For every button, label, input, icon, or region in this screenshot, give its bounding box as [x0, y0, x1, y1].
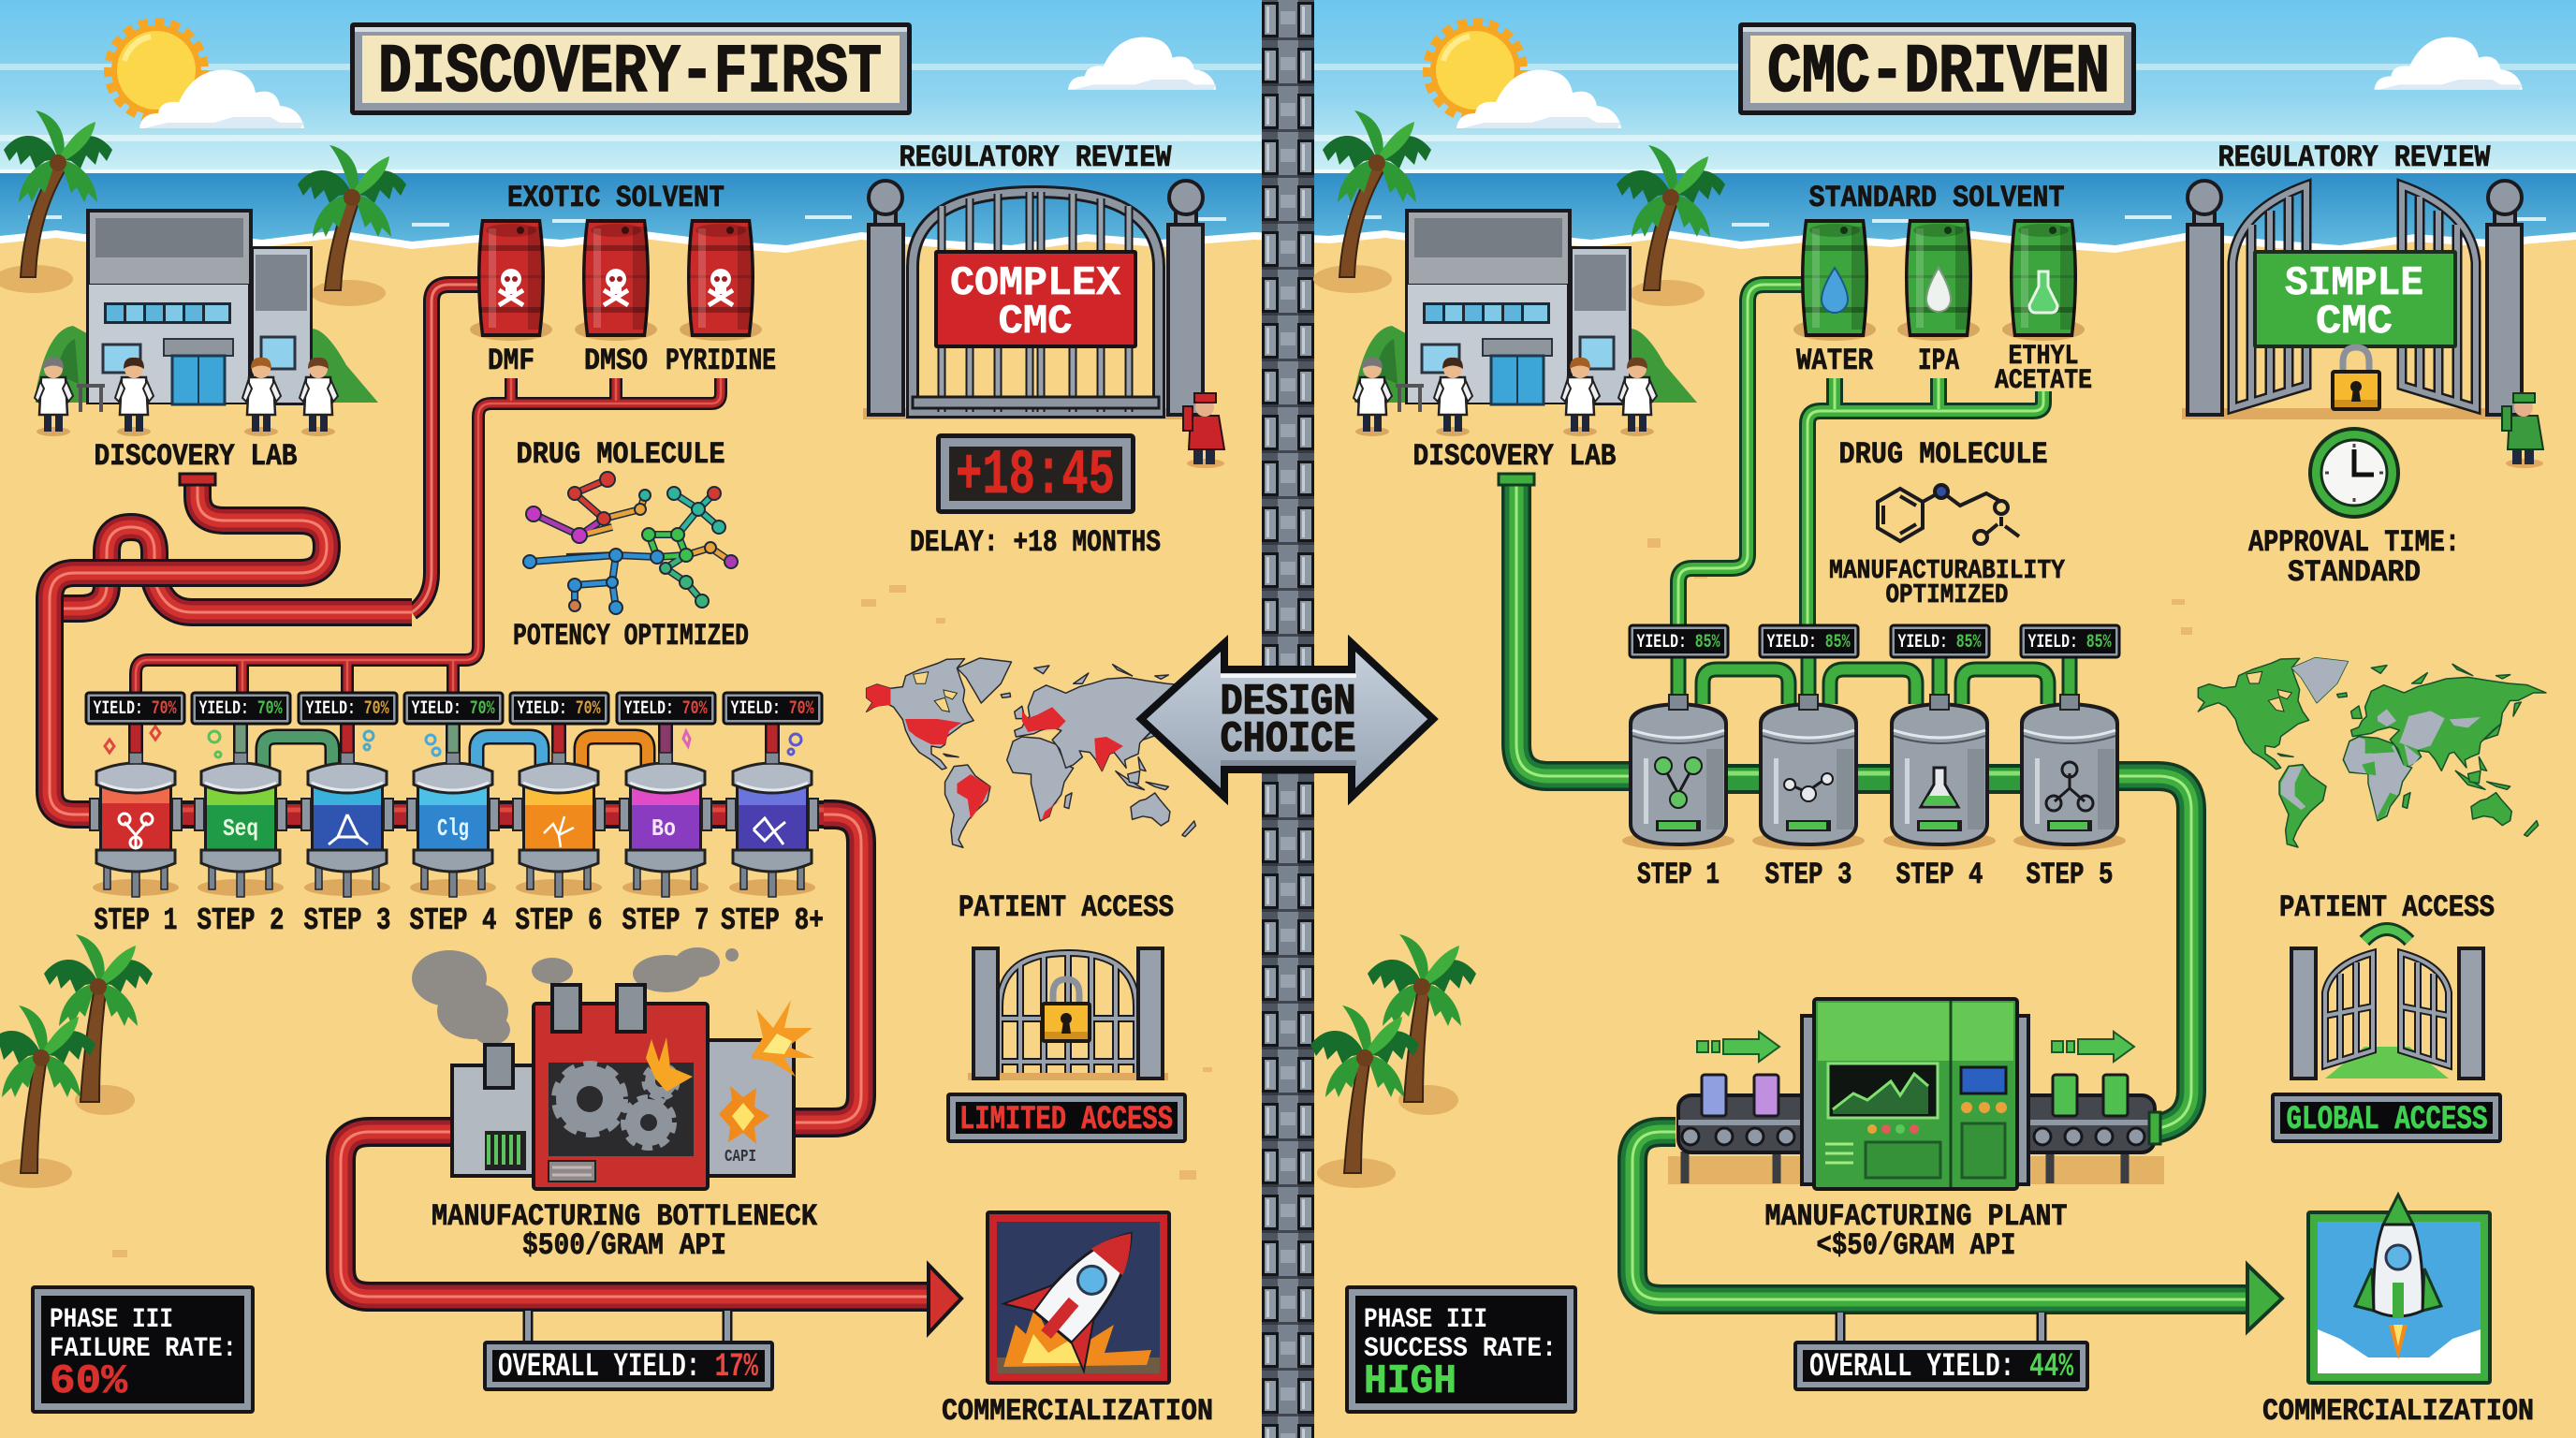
plant monitor: [1828, 1064, 1938, 1118]
step labels right: STEP 1: [1637, 858, 1720, 892]
label: discovery lab right: DISCOVERY LAB: [1413, 439, 1616, 474]
arrow: design choice: DESIGN: [1221, 678, 1355, 726]
yield badges right: [1630, 625, 2119, 657]
badge: step 1 yield: YIELD: 85%: [1636, 632, 1720, 653]
palm trees left top: [0, 110, 406, 306]
badge: step 3 yield: YIELD: 70%: [305, 698, 389, 720]
solvent labels right: ETHYL: [2009, 341, 2078, 373]
phase iii failure box: FAILURE RATE:: [50, 1333, 237, 1365]
badge: step 7 yield: [617, 693, 715, 724]
step labels left: [94, 903, 824, 938]
badge: step 4 yield: YIELD: 70%: [412, 698, 495, 720]
process pipes between right tanks: [1633, 657, 2115, 779]
commercialization rocket launch: [2306, 1195, 2492, 1385]
step labels right: STEP 4: [1896, 858, 1983, 892]
label: discovery lab: DISCOVERY LAB: [94, 439, 298, 474]
manufacturing bottleneck machine: [412, 947, 814, 1189]
label: patient access left: PATIENT ACCESS: [959, 890, 1174, 925]
vessel: step 2: [195, 753, 286, 897]
step labels right: [1637, 858, 2114, 892]
badge: step 5 yield: YIELD: 85%: [2027, 632, 2112, 653]
map patches: green africa: [2362, 744, 2398, 819]
palm trees right top: [1313, 110, 1725, 306]
world map right: [2198, 658, 2546, 847]
map highlights: red markets: [867, 684, 1123, 820]
sign: complex cmc: CMC: [998, 299, 1073, 345]
badge: global access: [2271, 1093, 2502, 1143]
badge: step 3 yield: YIELD: 85%: [1767, 632, 1851, 653]
label: commercialization right: COMMERCIALIZATION: [2262, 1394, 2534, 1429]
solvent labels right: IPA: [1918, 344, 1960, 378]
sign: simple cmc: [2253, 250, 2457, 348]
floating particles above vessels: [105, 726, 801, 757]
process pipes between left vessels: [96, 724, 824, 814]
label: manufacturing bottleneck: $500/GRAM API: [522, 1228, 726, 1263]
step tanks right: [1622, 695, 2126, 850]
label: manufacturing bottleneck: [432, 1199, 818, 1263]
label: approval time: STANDARD: [2288, 555, 2421, 590]
vessel: step 7: Bo: [651, 814, 676, 843]
tank: step 5: [2013, 695, 2126, 850]
chimneys: [485, 985, 645, 1088]
barrel: water: [1793, 219, 1876, 341]
badge: step 1 yield: [86, 693, 184, 724]
icon: clock: [2308, 427, 2400, 519]
icon: small cloud: [1068, 37, 1216, 90]
label: regulatory review right: REGULATORY REVIEW: [2218, 140, 2491, 175]
label: approval time: APPROVAL TIME:: [2248, 525, 2460, 560]
rocket body tilted: [1003, 1200, 1171, 1372]
map gaps: grey regions: [2281, 658, 2481, 819]
label: manufacturability optimized: MANUFACTURABILITY: [1829, 555, 2065, 586]
phase iii failure box: [31, 1285, 255, 1414]
solvent labels left: DMSO: [584, 344, 648, 378]
conveyor belt: [1678, 1095, 2155, 1183]
label: standard solvent: STANDARD SOLVENT: [1808, 181, 2065, 215]
label: manufacturing bottleneck: MANUFACTURING BOTTLENECK: [432, 1199, 818, 1234]
discovery lab building right: [1354, 209, 1697, 436]
icon: simple drug molecule: [1878, 485, 2019, 544]
vessel: step 1: [90, 753, 182, 897]
sign: simple cmc: CMC: [2316, 299, 2393, 345]
pipe right: plant to commercialization: [1632, 1132, 2282, 1331]
icon: open padlock: [2331, 347, 2381, 411]
barrel: ipa: [1897, 219, 1980, 341]
overall yield sign right: [1793, 1313, 2089, 1391]
phase iii success box: [1345, 1285, 1577, 1414]
step labels left: STEP 6: [515, 903, 603, 938]
barrel: dmf: [470, 219, 552, 341]
tank: step 3: [1752, 695, 1865, 850]
palm trees right bottom: [1310, 934, 1476, 1188]
step labels left: STEP 4: [410, 903, 496, 938]
sign: complex cmc: [934, 250, 1137, 348]
badge: limited access: [946, 1093, 1187, 1143]
pipe right connector to plant: [2149, 1112, 2160, 1144]
main green pipe right: [1499, 474, 2191, 1128]
badge: step 2 yield: [192, 693, 290, 724]
sparks: [646, 1037, 693, 1092]
sign: complex cmc: COMPLEX: [950, 260, 1121, 307]
delay timer: +18:45: [956, 440, 1115, 512]
badge: step 7 yield: YIELD: 70%: [623, 698, 708, 720]
phase iii success box: PHASE III: [1364, 1304, 1487, 1336]
badge: step 6 yield: YIELD: 70%: [517, 698, 601, 720]
badge: step 4 yield: [1891, 625, 1989, 657]
icon: cloud: [139, 70, 304, 128]
overall yield sign left: [483, 1311, 774, 1391]
badge: step 2 yield: YIELD: 70%: [198, 698, 283, 720]
icon: cloud right: [1456, 70, 1621, 128]
tank: step 4: [1883, 695, 1996, 850]
label: potency optimized: POTENCY OPTIMIZED: [513, 619, 749, 653]
label: manufacturability optimized: [1829, 555, 2065, 610]
solvent labels right: [1796, 341, 2092, 397]
solvent labels left: DMF: [488, 344, 534, 378]
label: manufacturing plant: [1765, 1199, 2067, 1263]
icon: sun right: [1427, 22, 1523, 118]
icon: complex drug molecule: [523, 472, 738, 614]
phase iii success box: HIGH: [1364, 1358, 1456, 1405]
label: patient access right: PATIENT ACCESS: [2279, 890, 2495, 925]
yield badges left: [86, 693, 822, 724]
right panel: sky scenery: [1427, 22, 2523, 128]
smoke: [412, 947, 739, 1045]
pipe left: bottleneck to commercialization: [341, 1132, 961, 1333]
vessel: step 7: [620, 753, 711, 897]
solvent labels left: PYRIDINE: [666, 344, 776, 378]
pipes left: solvent manifold: [136, 285, 721, 695]
badge: step 6 yield: [510, 693, 608, 724]
label: regulatory review left: REGULATORY REVIEW: [899, 140, 1172, 175]
gears: [556, 1065, 677, 1146]
vessel: step 2: Seq: [223, 814, 258, 843]
patient access gate open: [2291, 929, 2483, 1078]
overall yield sign left: OVERALL YIELD: 17%: [498, 1348, 759, 1386]
title: discovery-first: DISCOVERY-FIRST: [378, 34, 882, 111]
manufacturing plant: [1668, 999, 2164, 1189]
commercialization failed rocket: [986, 1200, 1171, 1385]
badge: global access: GLOBAL ACCESS: [2286, 1101, 2488, 1138]
label: manufacturing plant: <$50/GRAM API: [1816, 1228, 2016, 1263]
overall yield sign right: OVERALL YIELD: 44%: [1809, 1348, 2074, 1386]
badge: step 8+ yield: YIELD: 70%: [730, 698, 814, 720]
regulatory gate open: [2182, 181, 2530, 419]
step labels left: STEP 1: [94, 903, 178, 938]
regulatory gate closed: [863, 181, 1211, 419]
step labels right: STEP 5: [2026, 858, 2114, 892]
step labels left: STEP 3: [303, 903, 391, 938]
label: manufacturability optimized: OPTIMIZED: [1885, 580, 2009, 610]
vessel: step 4: [407, 753, 499, 897]
badge: step 4 yield: [404, 693, 503, 724]
patient access gate locked: [968, 948, 1168, 1080]
delay timer: [936, 433, 1135, 514]
badge: step 1 yield: [1630, 625, 1728, 657]
palm trees left bottom: [0, 934, 153, 1188]
red barrels: [470, 219, 762, 341]
badge: step 4 yield: YIELD: 85%: [1898, 632, 1982, 653]
arrow: design choice: [1141, 643, 1433, 797]
solvent labels right: WATER: [1796, 344, 1874, 378]
pipes right: solvent lines: [1678, 285, 2043, 627]
sign: simple cmc: SIMPLE: [2285, 260, 2423, 307]
arrow: design choice: CHOICE: [1221, 715, 1355, 764]
bottles: [1702, 1075, 2128, 1116]
chain divider: [1262, 0, 1314, 1438]
badge: step 3 yield: [299, 693, 397, 724]
vessel: step 6: [513, 753, 605, 897]
green barrels: [1793, 219, 2085, 341]
title: cmc-driven: CMC-DRIVEN: [1767, 34, 2110, 111]
solvent labels left: [488, 344, 776, 378]
flow arrows: [1697, 1032, 2134, 1062]
icon: green guard: [2502, 393, 2543, 468]
badge: limited access: LIMITED ACCESS: [959, 1101, 1173, 1138]
label: commercialization left: COMMERCIALIZATION: [942, 1394, 1213, 1429]
step labels right: STEP 3: [1765, 858, 1852, 892]
tank: step 1: [1622, 695, 1734, 850]
phase iii failure box: 60%: [50, 1358, 128, 1405]
barrel: pyridine: [680, 219, 762, 341]
step labels left: STEP 8+: [721, 903, 824, 938]
label: approval time: [2248, 525, 2460, 590]
vessel: step 4: Clg: [437, 814, 469, 843]
world map left: [867, 658, 1203, 847]
barrel: dmso: [575, 219, 657, 341]
discovery lab building: [35, 209, 378, 436]
phase iii success box: SUCCESS RATE:: [1364, 1333, 1557, 1365]
barrel: ethyl acetate: [2002, 219, 2085, 341]
icon: small cloud right: [2374, 37, 2523, 90]
tangled pipe left: [50, 474, 412, 814]
pipe left: vessels to bottleneck: [793, 814, 861, 1123]
label: delay: DELAY: +18 MONTHS: [910, 525, 1161, 560]
badge: step 5 yield: [2021, 625, 2119, 657]
badge: step 3 yield: [1760, 625, 1858, 657]
icon: sun: [109, 22, 204, 118]
icon: red guard: [1183, 393, 1224, 468]
step vessels left: [90, 753, 818, 897]
vessel: step 3: [301, 753, 393, 897]
label: manufacturing plant: MANUFACTURING PLANT: [1765, 1199, 2067, 1234]
solvent labels right: ACETATE: [1995, 365, 2092, 397]
badge: step 8+ yield: [724, 693, 822, 724]
badge: step 1 yield: YIELD: 70%: [94, 698, 177, 720]
step labels left: STEP 2: [197, 903, 285, 938]
label: drug molecule right: DRUG MOLECULE: [1838, 437, 2048, 472]
left panel: sky scenery: [109, 22, 1216, 128]
label: exotic solvent: EXOTIC SOLVENT: [507, 181, 724, 215]
phase iii failure box: PHASE III: [50, 1304, 173, 1336]
step labels left: STEP 7: [622, 903, 710, 938]
vessel: step 8+: [726, 753, 818, 897]
label: drug molecule left: DRUG MOLECULE: [517, 437, 724, 472]
manufacturing bottleneck machine: CAPI: [724, 1148, 756, 1167]
